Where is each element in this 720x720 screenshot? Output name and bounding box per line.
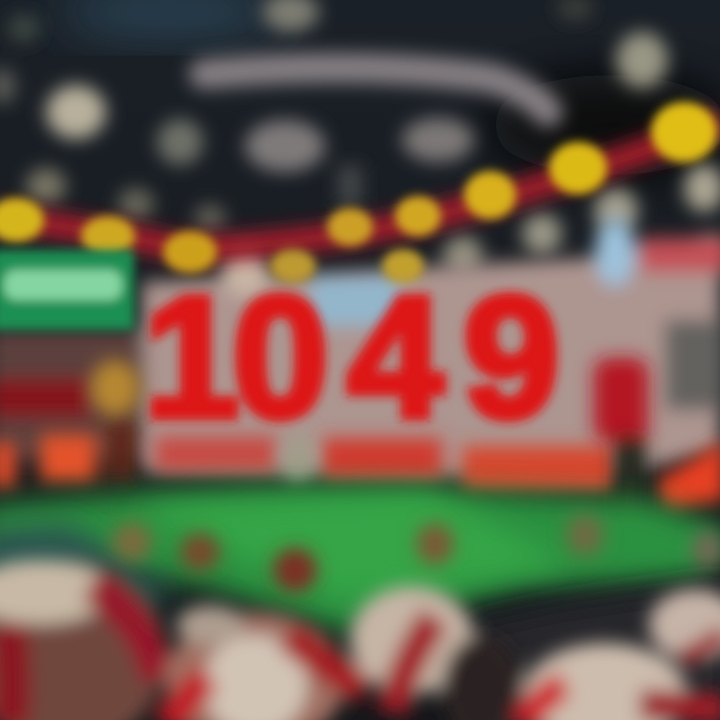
ball: centre left [165, 605, 365, 720]
small balls on pitch [112, 514, 720, 592]
dark lower corner [470, 580, 720, 720]
ball: right [523, 589, 720, 720]
bunting garland [0, 102, 720, 283]
green pitch [0, 487, 720, 632]
ball: centre [350, 586, 522, 720]
red banner strip below number [0, 420, 720, 512]
ball: left [0, 560, 165, 720]
player figures [90, 358, 648, 548]
foreground red and white balls [0, 560, 720, 720]
green sign [0, 250, 134, 330]
floating light bokeh dots [0, 0, 720, 277]
blurred title [204, 68, 548, 207]
big number: 1049 [143, 259, 560, 454]
back panel behind number [0, 218, 720, 480]
